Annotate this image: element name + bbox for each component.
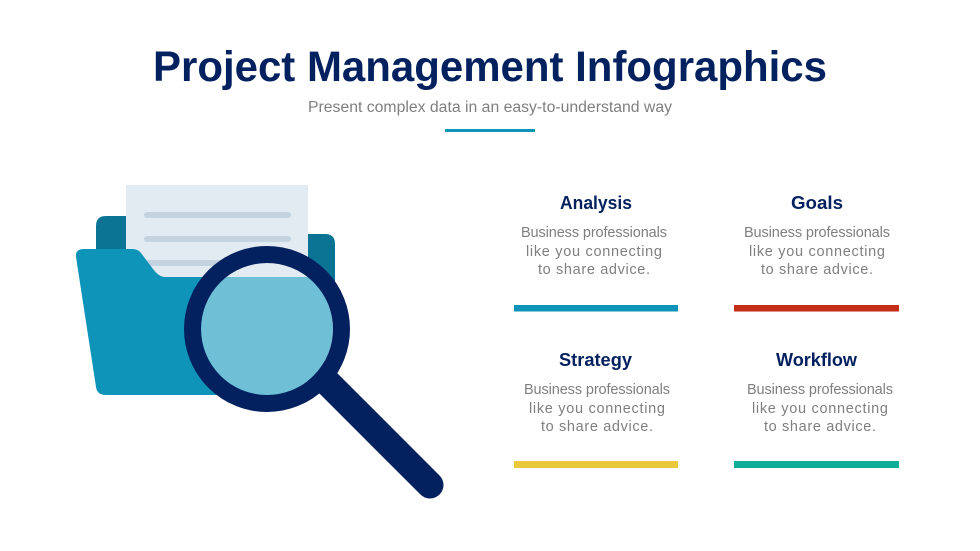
paper sheet [126,185,308,280]
body text: to share advice. [761,262,873,278]
body text: like you connecting [526,244,662,260]
body text [521,225,667,278]
body text: like you connecting [749,244,885,260]
title underline [445,129,535,132]
bar [734,305,899,312]
body text: Business professionals [524,382,670,398]
body text: to share advice. [538,262,650,278]
body text: to share advice. [764,419,876,435]
body text: Business professionals [747,382,893,398]
folder front [76,249,300,395]
heading: Goals [791,192,843,213]
panel: Goals [734,192,899,312]
body text [747,382,893,435]
magnifier lens [192,254,342,404]
body text: like you connecting [529,401,665,417]
heading: Workflow [776,349,858,370]
body text: to share advice. [541,419,653,435]
folder back [96,216,335,300]
panel: Strategy [514,349,678,468]
body text [524,382,670,435]
bar [514,305,678,312]
body text: Business professionals [744,225,890,241]
subtitle: Present complex data in an easy-to-understand way [308,99,672,116]
icon: folder and magnifying glass [76,185,430,485]
title: Project Management Infographics [153,43,827,91]
bar [514,461,678,468]
body text: Business professionals [521,225,667,241]
magnifier handle [320,375,430,485]
body text: like you connecting [752,401,888,417]
bar [734,461,899,468]
heading: Analysis [560,192,632,213]
heading: Strategy [559,349,633,370]
body text [744,225,890,278]
panel: Analysis [514,192,678,312]
panel: Workflow [734,349,899,468]
